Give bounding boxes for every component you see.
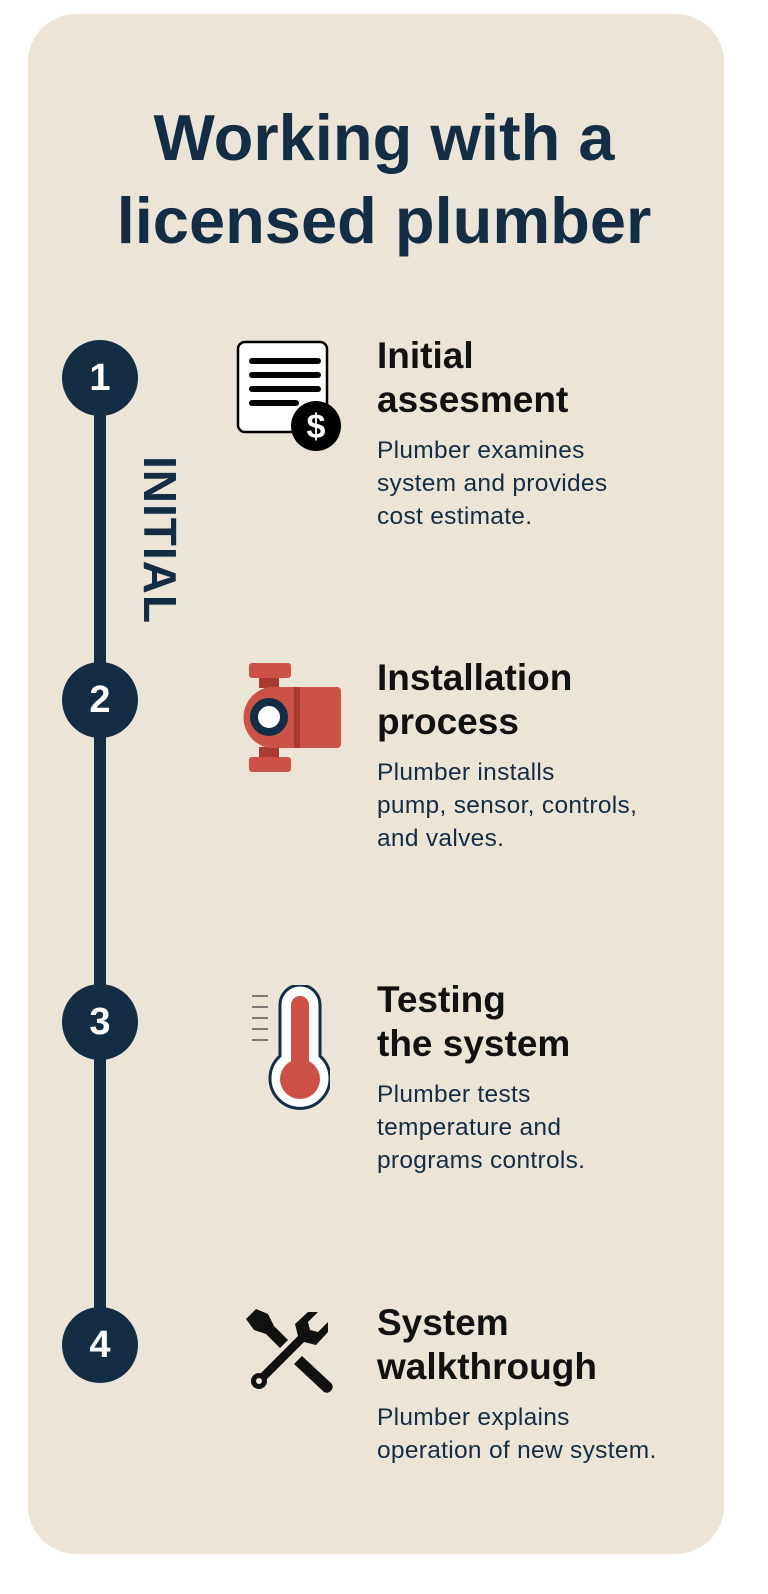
step number 4: 4 [89,1324,111,1366]
icon: tools [246,1309,333,1393]
step 2 text: and valves. [377,825,504,852]
timeline line [94,380,106,1345]
step 4 text: System [377,1302,509,1343]
icon: thermometer [252,985,330,1110]
step 4 text [376,1302,657,1464]
vertical label: INITIAL: INITIAL [134,456,186,624]
title: Working with a [153,101,615,174]
step number 1: 1 [89,357,111,399]
title: licensed plumber [117,184,651,257]
step 4 text: walkthrough [377,1346,597,1387]
step 2 text: Plumber installs [377,759,555,786]
title [117,101,651,257]
step 3 text: Plumber tests [377,1081,531,1108]
icon: pump [244,663,341,772]
step number 2 [62,662,138,738]
step 3 text: Testing [377,979,506,1020]
step 3 text: temperature and [377,1114,561,1141]
step 1 text [377,335,607,530]
step 3 text [377,979,585,1174]
step number 1 [62,340,138,416]
step 2 text: pump, sensor, controls, [377,792,637,819]
step 1 text: cost estimate. [377,503,532,530]
step 1 text: system and provides [377,470,607,497]
step 1 text: Initial [377,335,474,376]
step 3 text: the system [377,1023,570,1064]
step 4 text: operation of new system. [377,1437,657,1464]
step 4 text: Plumber explains [377,1404,570,1431]
icon: document with dollar [236,340,341,451]
step number 3 [62,984,138,1060]
step 2 text: Installation [377,657,572,698]
step number 2: 2 [89,679,111,721]
step 2 text: process [377,701,519,742]
step 1 text: Plumber examines [377,437,585,464]
step 2 text [377,657,637,852]
icon: document with dollar: $ [307,408,326,446]
step number 3: 3 [89,1001,111,1043]
step number 4 [62,1307,138,1383]
step 1 text: assesment [377,379,568,420]
step 3 text: programs controls. [377,1147,585,1174]
